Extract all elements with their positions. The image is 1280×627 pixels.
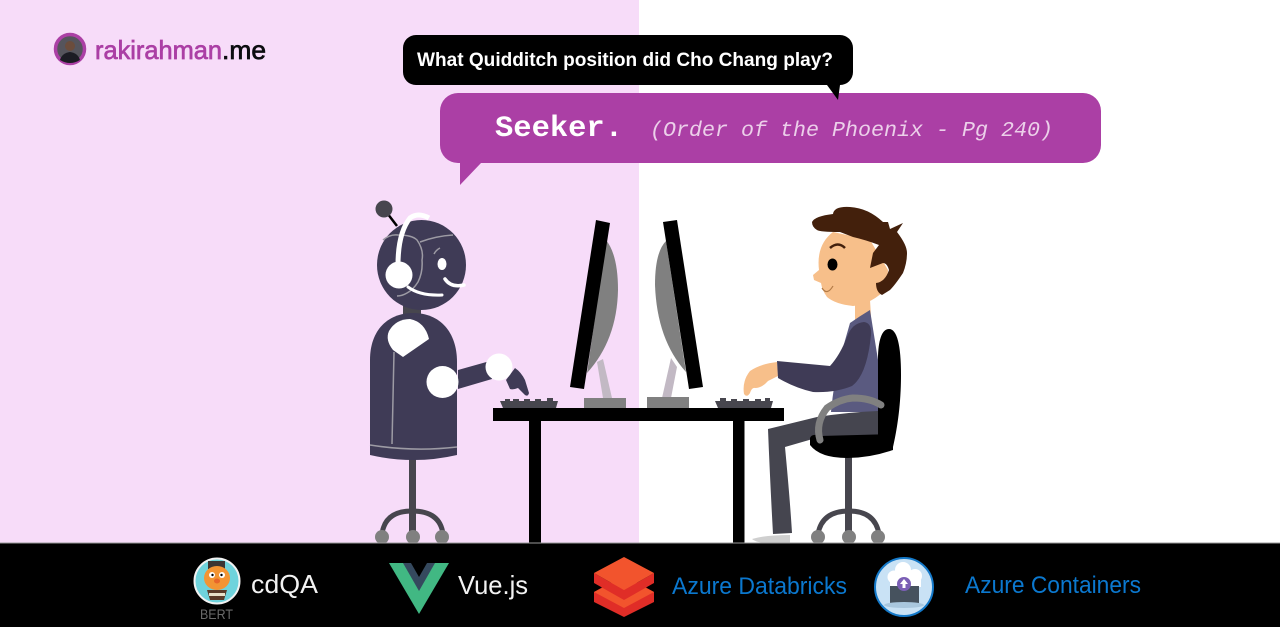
armrest [819, 398, 881, 440]
robot body seams [370, 352, 457, 449]
chair stand and wheels [811, 456, 885, 544]
robot wrist joint [486, 354, 512, 380]
robot antenna [376, 200, 397, 226]
label: BERT: BERT [200, 606, 233, 622]
panel: pink robot side background [0, 0, 639, 543]
robot neck [403, 304, 421, 317]
left keyboard [500, 398, 558, 408]
robot face [434, 248, 464, 286]
right monitor [647, 220, 703, 408]
torso [831, 310, 878, 412]
bottom logo bar [0, 542, 1280, 627]
eye [828, 258, 838, 270]
logo: rakirahman.me [56, 34, 266, 65]
icon: Vue logo [389, 563, 449, 614]
label: Azure Containers: Azure Containers [965, 572, 1141, 599]
robot hand [506, 368, 529, 396]
smile [822, 286, 833, 292]
robot head seams [383, 235, 453, 296]
shoe shadow [752, 535, 790, 543]
right keyboard [715, 398, 773, 408]
panel: white human side background [639, 0, 1280, 543]
robot body [370, 313, 457, 460]
label: cdQA: cdQA [251, 569, 319, 599]
robot headset [386, 215, 442, 295]
eyebrow [830, 244, 845, 248]
callout: answer speech bubble: Seeker. [495, 112, 623, 146]
robot stand and wheels [375, 458, 449, 544]
robot character [370, 200, 529, 544]
callout: answer speech bubble [440, 93, 1101, 185]
label: Azure Databricks: Azure Databricks [672, 573, 847, 600]
callout: question speech bubble: What Quidditch position did Cho Chang play? [417, 50, 833, 71]
chair seat [810, 434, 893, 458]
trousers [768, 411, 878, 534]
logo: rakirahman.me: rakirahman [95, 35, 222, 65]
neck [855, 300, 871, 322]
left monitor [570, 220, 626, 408]
label: Vue.js: Vue.js [458, 570, 528, 600]
sleeve [777, 322, 871, 392]
callout: answer speech bubble: (Order of the Phoenix - Pg 240) [650, 119, 1053, 143]
hand [744, 362, 778, 396]
callout: question speech bubble [403, 35, 853, 100]
icon: Azure Containers logo [875, 558, 933, 616]
face [813, 232, 888, 306]
robot head [377, 220, 466, 310]
chair back [860, 329, 901, 447]
icon: cdQA BERT avatar [194, 558, 240, 604]
logo: rakirahman.me: .me [222, 35, 266, 65]
desk [493, 408, 784, 543]
person character [744, 207, 907, 544]
robot arm [458, 361, 492, 389]
icon: Azure Databricks logo [594, 557, 654, 617]
robot elbow joint [426, 366, 458, 398]
robot shoulder [388, 319, 429, 357]
hair [812, 207, 907, 295]
